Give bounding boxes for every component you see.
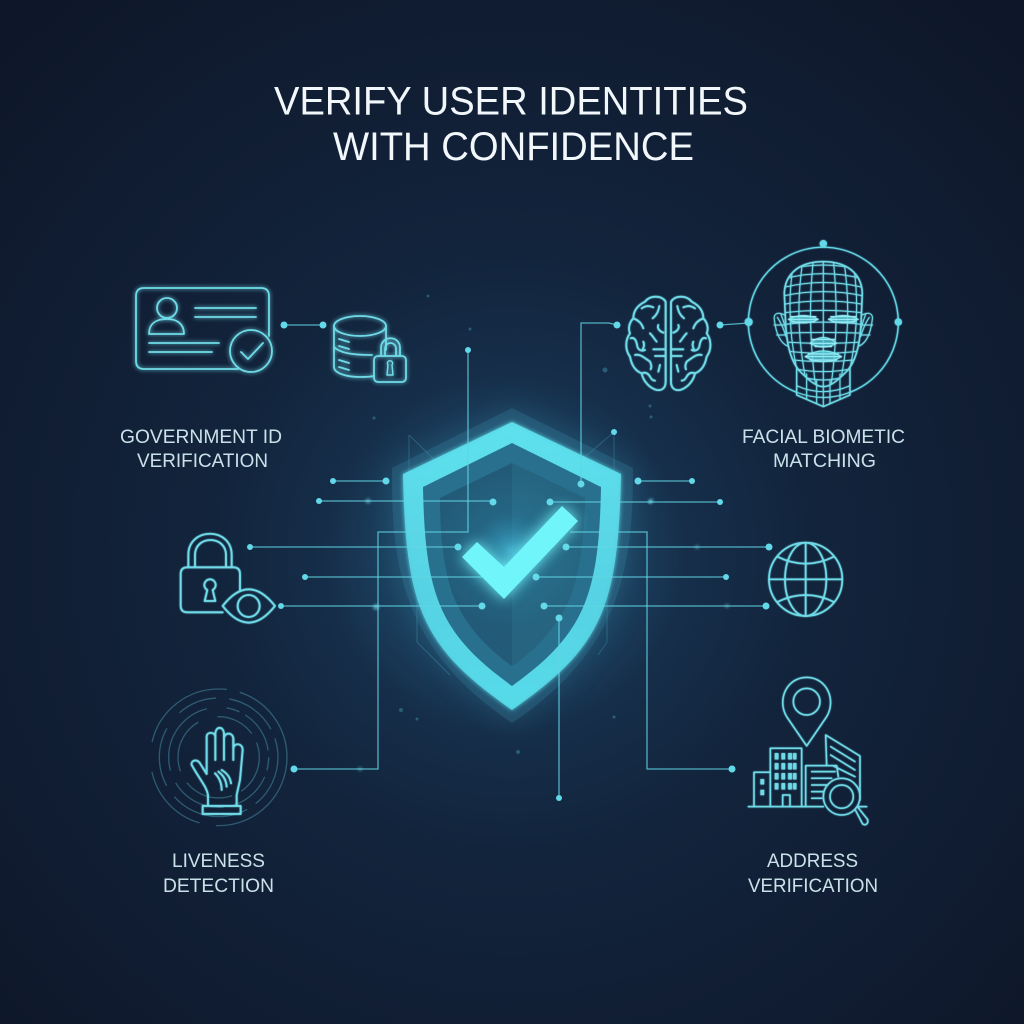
shield check mark	[462, 506, 578, 599]
connector: ID to database	[280, 322, 326, 328]
label: address	[748, 850, 878, 897]
shield	[403, 422, 621, 710]
shield halo	[392, 408, 633, 723]
icon: database with lock	[334, 316, 406, 382]
central glow	[430, 470, 590, 630]
scan ring	[748, 247, 898, 392]
label: government ID: VERIFICATION	[137, 450, 268, 472]
label: facial biometric: FACIAL BIOMETIC	[742, 426, 905, 448]
label: address: ADDRESS	[767, 850, 858, 872]
label: liveness: DETECTION	[163, 875, 274, 897]
connector lines	[248, 323, 770, 798]
label: government ID	[120, 426, 282, 472]
label: facial biometric	[742, 426, 905, 472]
icon: hand with liveness rings	[150, 689, 287, 826]
label: liveness	[163, 850, 274, 897]
ring node left	[745, 318, 753, 326]
connector dots	[247, 322, 772, 801]
label: address: VERIFICATION	[748, 875, 878, 897]
ring node right	[895, 318, 902, 326]
icon: globe	[769, 543, 842, 616]
icon: padlock with eye	[181, 534, 275, 623]
line glints	[358, 499, 728, 770]
title: WITH CONFIDENCE	[333, 125, 694, 169]
background particles	[372, 294, 652, 754]
icon: location pin and buildings	[748, 677, 868, 825]
icon: brain	[626, 297, 710, 390]
title	[274, 80, 748, 169]
connector: brain to face	[716, 322, 749, 328]
icon: facial wireframe	[745, 240, 902, 408]
label: facial biometric: MATCHING	[773, 450, 876, 472]
faint circuit traces behind shield	[409, 432, 614, 675]
label: liveness: LIVENESS	[172, 850, 265, 872]
ring node top	[820, 240, 827, 247]
label: government ID: GOVERNMENT ID	[120, 426, 282, 448]
scan arcs	[150, 689, 287, 826]
title: VERIFY USER IDENTITIES	[274, 80, 748, 124]
icon: government ID card	[136, 288, 272, 372]
